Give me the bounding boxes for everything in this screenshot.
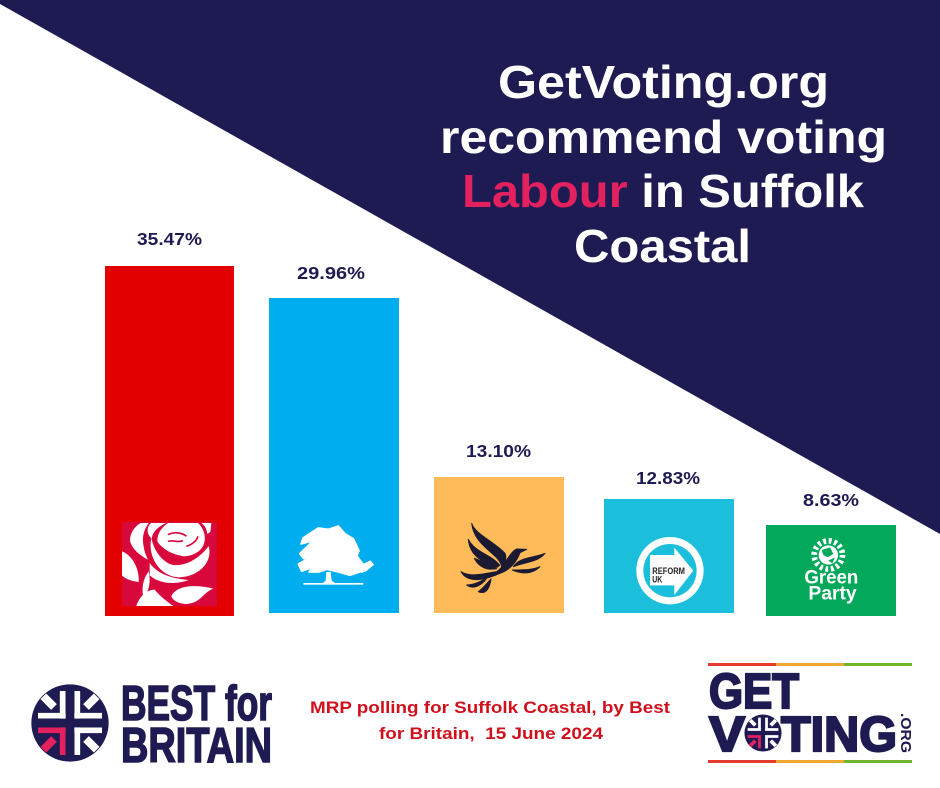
logo: Best for Britain: BRITAIN — [121, 719, 272, 773]
logo: GetVoting.org: .ORG — [897, 713, 914, 753]
bar: Green Party: 8.63% — [803, 490, 859, 510]
bar: Conservative — [269, 263, 399, 613]
navy diagonal banner — [0, 0, 940, 534]
icon: Conservative tree — [298, 526, 373, 585]
bar chart — [105, 229, 896, 616]
bar: Reform UK: 12.83% — [636, 468, 700, 488]
icon: Green Party — [804, 542, 858, 604]
icon: Green Party: Party — [808, 583, 857, 604]
bar: Liberal Democrat — [434, 441, 564, 613]
icon: Reform UK: UK — [652, 575, 662, 585]
icon: Green Party: Green — [804, 567, 858, 588]
bar: Labour — [105, 229, 234, 616]
icon: union flag O — [744, 714, 782, 752]
title — [440, 56, 887, 272]
logo: GetVoting.org: V — [709, 708, 745, 762]
logo: GetVoting.org: TING — [781, 708, 897, 762]
logo: Best for Britain — [31, 677, 272, 773]
logo: GetVoting.org: GET — [709, 665, 799, 719]
bar: Conservative: 29.96% — [297, 263, 365, 283]
icon: Labour rose — [122, 522, 217, 606]
bar: Green Party — [766, 490, 896, 616]
icon: Reform UK — [636, 537, 704, 604]
bar: Liberal Democrat: 13.10% — [466, 441, 531, 461]
icon: Reform UK: REFORM — [652, 566, 685, 576]
bar: Reform UK — [604, 468, 734, 613]
source caption: for Britain, 15 June 2024 — [379, 724, 604, 743]
logo: Best for Britain: BEST for — [121, 677, 272, 731]
title: Coastal — [574, 220, 751, 272]
icon: union flag circle — [31, 684, 109, 762]
icon: Liberal Democrat bird — [461, 523, 545, 593]
source caption — [310, 698, 670, 743]
title: Labour in Suffolk — [462, 165, 864, 217]
bar: Labour: 35.47% — [137, 229, 202, 249]
source caption: MRP polling for Suffolk Coastal, by Best — [310, 698, 670, 717]
title: recommend voting — [440, 111, 887, 163]
logo: GetVoting.org — [708, 663, 914, 763]
title: GetVoting.org — [498, 56, 829, 108]
